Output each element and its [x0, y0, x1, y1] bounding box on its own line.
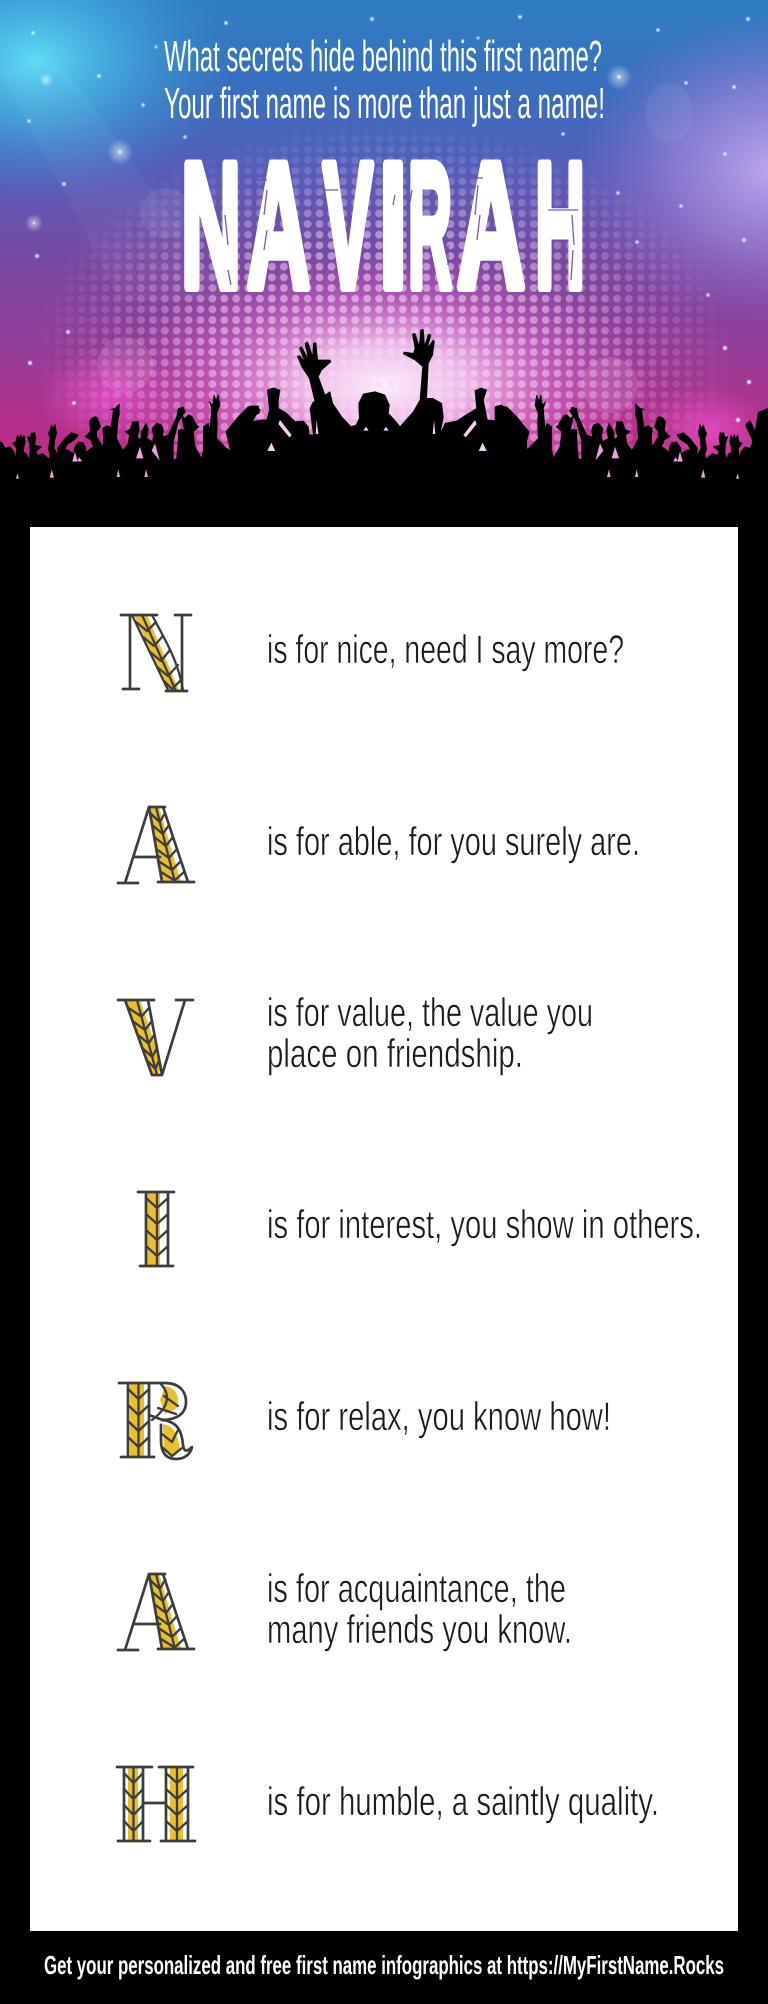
- title: name: R: [408, 126, 452, 325]
- row N: text: is for nice, need I say more?: [267, 628, 624, 672]
- text: H: [535, 126, 585, 325]
- panel: white content card: [30, 527, 738, 1931]
- crowd silhouette: [0, 329, 768, 530]
- row V: text: [267, 991, 593, 1076]
- title: name: [181, 126, 585, 325]
- row V: letter icon: [118, 1000, 193, 1075]
- crowd: centre figures: [243, 329, 527, 480]
- row A2: text: many friends you know.: [267, 1608, 572, 1652]
- row A: text: is for able, for you surely are.: [267, 820, 640, 864]
- row A2: text: [267, 1567, 572, 1652]
- row A2: letter icon: [118, 1574, 194, 1650]
- heading: tagline: [164, 32, 605, 128]
- row I: letter icon: [138, 1192, 174, 1266]
- title: name: V: [323, 126, 373, 325]
- crowd: left side: [0, 395, 260, 480]
- crowd: right side mirrored: [495, 395, 755, 480]
- title: name: I: [379, 126, 407, 325]
- header stage backdrop: [0, 0, 768, 460]
- crowd: far right arm: [745, 408, 768, 480]
- title: name: N: [181, 126, 241, 325]
- row V: text: is for value, the value you: [267, 991, 593, 1035]
- title: name: A: [247, 126, 310, 325]
- title: name: A: [457, 126, 525, 325]
- row A: letter icon: [118, 807, 194, 883]
- row R: text: is for relax, you know how!: [267, 1395, 611, 1439]
- row N: letter icon: [121, 615, 191, 691]
- row H: letter icon: [117, 1767, 195, 1841]
- row A2: text: is for acquaintance, the: [267, 1567, 566, 1611]
- row R: letter icon: [119, 1383, 192, 1459]
- row V: text: place on friendship.: [267, 1032, 523, 1076]
